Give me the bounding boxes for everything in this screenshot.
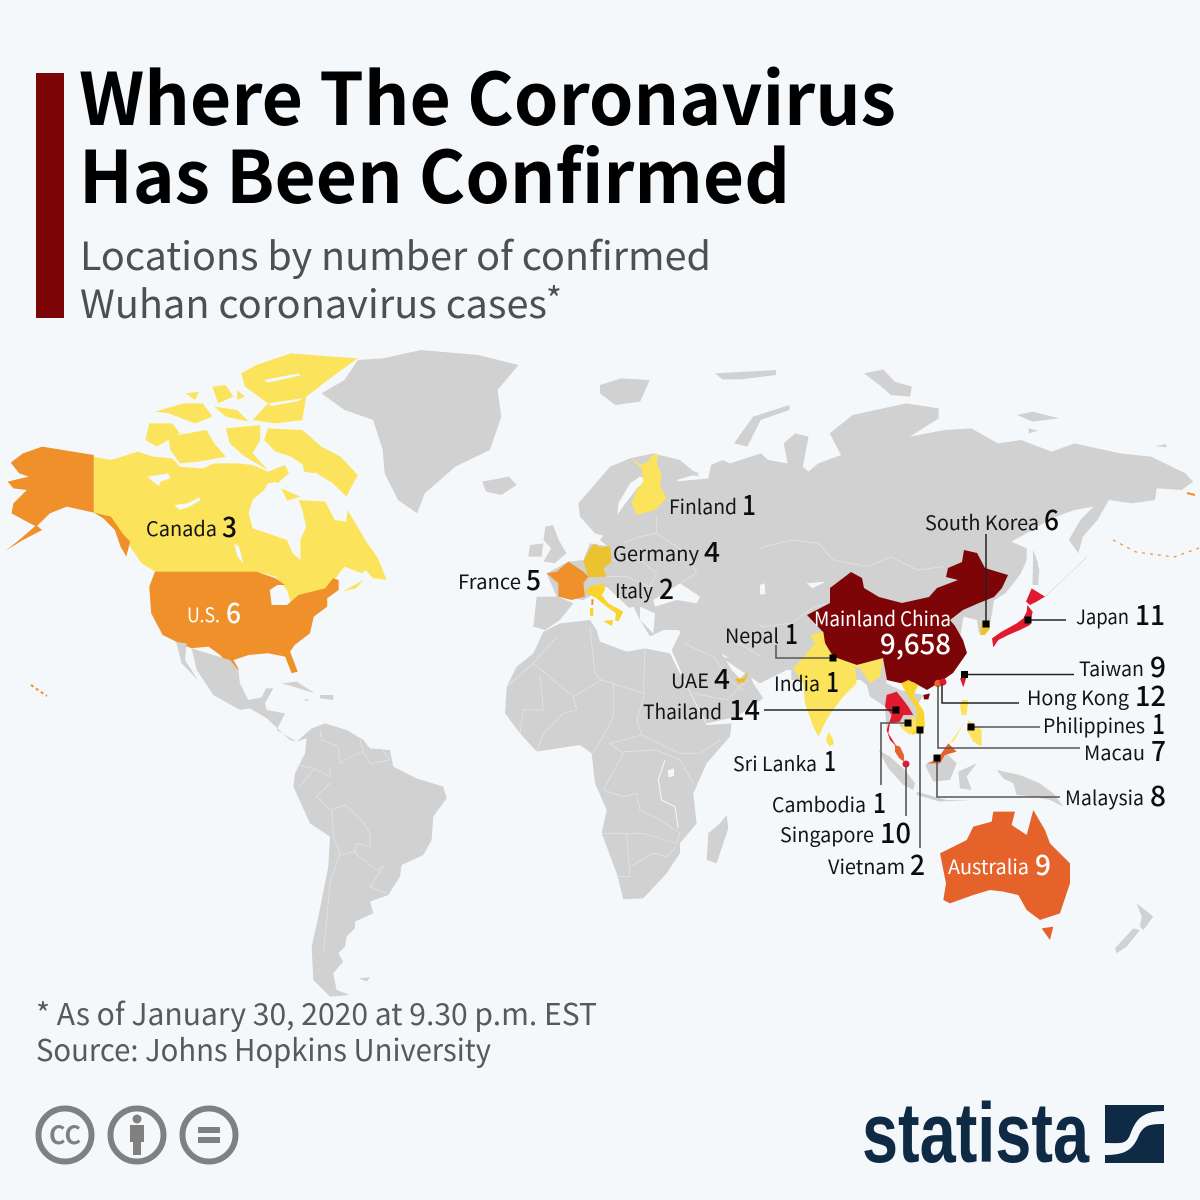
label: Singapore: Singapore: [780, 819, 874, 848]
india: [793, 632, 883, 747]
source note: * As of January 30, 2020 at 9.30 p.m. EST: [36, 990, 597, 1034]
south america: [293, 723, 447, 997]
south and southeast asia base: [720, 633, 923, 763]
vietnam: [901, 680, 925, 735]
label: Singapore: 10: [880, 812, 911, 852]
label: Macau: 7: [1151, 730, 1166, 770]
icon: attribution: [110, 1108, 164, 1162]
accent bar: [36, 73, 64, 318]
label: Sri Lanka: 1: [824, 740, 836, 780]
label: Italy: 2: [659, 568, 674, 608]
label: Malaysia: [1065, 775, 1166, 815]
label: Thailand: 14: [729, 689, 760, 729]
label: Mainland China: [814, 603, 951, 663]
title: [79, 41, 896, 224]
borneo malaysia: [927, 743, 957, 763]
label: Macau: Macau: [1084, 737, 1145, 766]
label: Australia: 9: [1035, 844, 1051, 884]
label: Canada: 3: [222, 506, 237, 546]
label: Japan: [1076, 594, 1165, 634]
asia highlighted countries: [735, 632, 982, 763]
hawaii: [31, 685, 47, 696]
label: Australia: [948, 844, 1051, 884]
title: Has Been Confirmed: [79, 119, 790, 224]
label: Finland: 1: [742, 484, 756, 524]
label: Italy: [615, 568, 674, 608]
china: [807, 550, 1008, 690]
title: Where The Coronavirus: [79, 41, 896, 146]
label: Macau: [1084, 730, 1166, 770]
label: U.S.: 6: [226, 592, 241, 632]
label: Thailand: [643, 689, 760, 729]
subtitle: Wuhan coronavirus cases: [80, 274, 547, 330]
label: Philippines: Philippines: [1043, 710, 1145, 739]
arabia and middle east: [672, 620, 780, 723]
subtitle: [80, 226, 711, 330]
label: Hong Kong: 12: [1135, 675, 1166, 715]
label: Canada: [146, 506, 237, 546]
label: Sri Lanka: Sri Lanka: [733, 748, 817, 777]
label: Australia: Australia: [948, 851, 1029, 880]
label: France: [458, 559, 541, 599]
label: Cambodia: 1: [873, 782, 886, 822]
location markers: [830, 616, 1032, 762]
label: South Korea: South Korea: [925, 507, 1039, 536]
label: South Korea: [925, 499, 1059, 539]
singapore marker: [902, 760, 910, 768]
label: South Korea: 6: [1044, 499, 1059, 539]
label: Nepal: [725, 613, 798, 653]
label: Germany: [613, 531, 720, 571]
united states: [149, 572, 339, 673]
far east islands of united states: [1113, 493, 1199, 557]
europe base: [533, 453, 760, 637]
icon: creative commons: CC: [49, 1116, 81, 1152]
label: Thailand: Thailand: [643, 696, 722, 725]
cambodia: [902, 717, 917, 735]
label: Finland: Finland: [669, 491, 737, 520]
label: Vietnam: 2: [910, 844, 925, 884]
label: Philippines: [1043, 703, 1165, 743]
hainan: [923, 693, 930, 699]
label: Cambodia: [772, 782, 886, 822]
subtitle: *: [546, 273, 562, 322]
macau marker: [934, 680, 942, 687]
label: Italy: Italy: [615, 575, 654, 604]
taiwan: [960, 677, 967, 687]
greenland: [321, 350, 566, 563]
label: Japan: Japan: [1076, 601, 1129, 630]
label: Cambodia: Cambodia: [772, 789, 866, 818]
finland germany france italy: [547, 455, 667, 626]
icon: creative commons: [38, 1108, 92, 1162]
thailand: [885, 692, 913, 747]
world map: [6, 350, 1199, 997]
northern eurasia: [600, 369, 1193, 680]
label: India: [774, 661, 839, 701]
alaska: [6, 447, 130, 557]
indonesia papua new zealand: [878, 750, 1153, 953]
canadian lakes: [147, 373, 302, 563]
subtitle: Locations by number of confirmed: [80, 226, 711, 282]
label: Hong Kong: [1027, 675, 1166, 715]
japan and south korea: [980, 588, 1045, 647]
label: Sri Lanka: [733, 740, 836, 780]
label: Hong Kong: Hong Kong: [1027, 682, 1129, 711]
source note: [36, 990, 597, 1070]
label: Malaysia: 8: [1150, 775, 1166, 815]
label: Vietnam: [828, 844, 925, 884]
label: Malaysia: Malaysia: [1065, 782, 1144, 811]
label: Nepal: Nepal: [725, 620, 779, 649]
leader lines: [764, 534, 1080, 848]
label: UAE: 4: [714, 658, 730, 698]
label: Taiwan: 9: [1150, 646, 1166, 686]
north america and greenland: [6, 350, 566, 673]
label: Mainland China: Mainland China: [814, 603, 951, 632]
label: France: 5: [526, 559, 541, 599]
mexico central america and caribbean: [176, 642, 333, 742]
canada: [94, 353, 387, 603]
uae: [735, 670, 749, 683]
africa: [505, 620, 732, 899]
label: Germany: 4: [704, 531, 720, 571]
label: Japan: 11: [1135, 594, 1165, 634]
australia: [940, 810, 1070, 940]
peninsular malaysia: [895, 745, 904, 762]
label: India: 1: [826, 661, 839, 701]
label: India: India: [774, 668, 820, 697]
label: Canada: Canada: [146, 513, 217, 542]
label: Vietnam: Vietnam: [828, 851, 905, 880]
label: UAE: [671, 658, 730, 698]
label: Finland: [669, 484, 756, 524]
label: Taiwan: [1079, 646, 1166, 686]
source note: Source: Johns Hopkins University: [36, 1026, 491, 1070]
label: Taiwan: Taiwan: [1079, 653, 1144, 682]
label: Singapore: [780, 812, 911, 852]
label: UAE: UAE: [671, 665, 709, 694]
label: U.S.: [187, 592, 241, 632]
hong kong marker: [940, 678, 946, 686]
kuril islands and sakhalin: [1033, 550, 1087, 597]
label: Mainland China: 9,658: [880, 623, 951, 663]
label: U.S.: U.S.: [187, 599, 220, 628]
label: Germany: Germany: [613, 538, 700, 567]
label: France: France: [458, 566, 521, 595]
label: Nepal: 1: [785, 613, 798, 653]
statista logo: statista: [862, 1086, 1090, 1180]
label: Philippines: 1: [1152, 703, 1165, 743]
philippines: [950, 700, 982, 747]
icon: no derivatives: [182, 1108, 236, 1162]
